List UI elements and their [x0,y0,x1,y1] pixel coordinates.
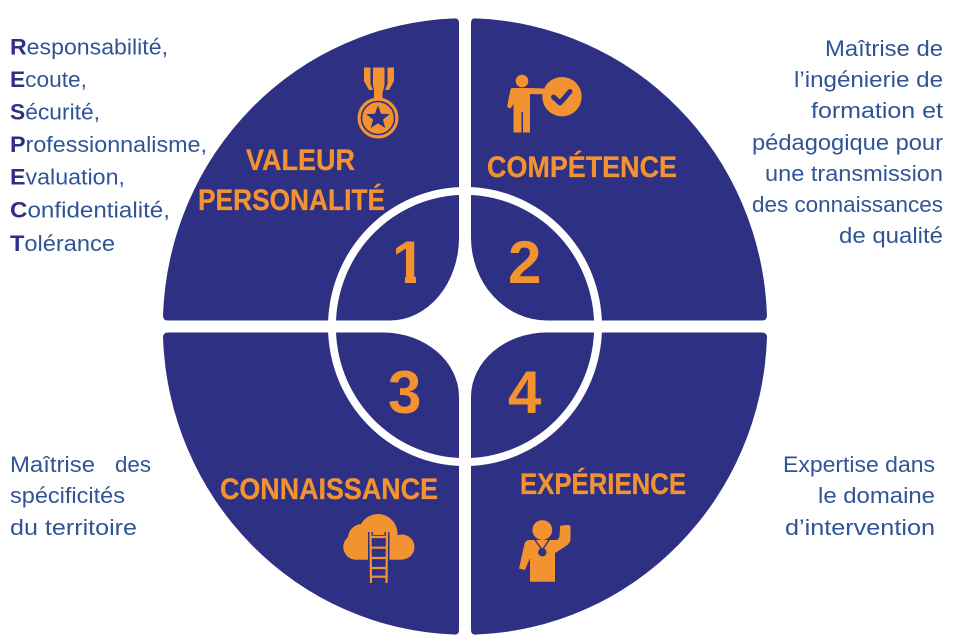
text block: expérience description: Expertise dans [783,452,935,477]
petal 1 [336,195,459,320]
line: Responsabilité: Responsabilité, [10,34,168,60]
number 2: 2 [508,229,541,296]
line: Professionnalisme: Professionnalisme, [10,132,207,157]
number 1: 1 [392,229,425,296]
text block: connaissance description: spécificités [10,483,125,508]
heading: valeur personalité: VALEUR [246,144,355,177]
text block: respect values [10,34,207,256]
line: Ecoute: Ecoute, [10,67,87,92]
heading: connaissance: CONNAISSANCE [220,473,438,506]
number 3: 3 [388,359,421,426]
text block: compétence description: pédagogique pour [752,130,943,155]
icon: medal [358,68,398,138]
text block: connaissance description: du territoire [10,515,137,540]
text block: compétence description: l’ingénierie de [794,67,943,92]
line: Confidentialité: Confidentialité, [10,198,170,222]
quadrant headings [198,144,686,506]
icon: person with medal raising hand [519,520,570,582]
text block: connaissance description [10,452,151,540]
line: Evaluation: Evaluation, [10,164,125,190]
heading: compétence: COMPÉTENCE [487,150,677,184]
text block: compétence description: des connaissances [752,192,943,217]
number 4: 4 [508,359,542,426]
numbers [388,229,542,426]
petal 2 [471,195,594,320]
heading: expérience: EXPÉRIENCE [520,467,686,501]
icon: person with check mark [507,75,582,132]
panel: valeur personalité quadrant [163,18,459,321]
text block: connaissance description: des [115,452,151,477]
text block: expérience description: d’intervention [785,515,935,540]
text block: expérience description: le domaine [818,483,935,508]
heading: valeur personalité: PERSONALITÉ [198,183,385,217]
text block: compétence description: de qualité [839,223,943,248]
petal 3 [336,332,459,458]
line: Tolérance: Tolérance [10,231,115,256]
text block: compétence description [752,36,943,248]
text block: compétence description: formation et [811,98,943,123]
heading: valeur personalité [198,144,385,217]
outer circle quadrants [163,18,767,635]
text block: compétence description: Maîtrise de [825,36,943,61]
panel: compétence quadrant [471,18,767,321]
icon: cloud with ladder [343,514,414,583]
text block: expérience description [783,452,935,540]
text block: compétence description: une transmission [765,161,943,186]
line: Sécurité: Sécurité, [10,100,100,124]
panel: expérience quadrant [471,332,767,635]
inner numbered petals [336,195,594,458]
petal 4 [471,332,594,458]
text block: connaissance description: Maîtrise [10,452,95,477]
white ring [328,187,602,466]
panel: connaissance quadrant [163,332,459,635]
